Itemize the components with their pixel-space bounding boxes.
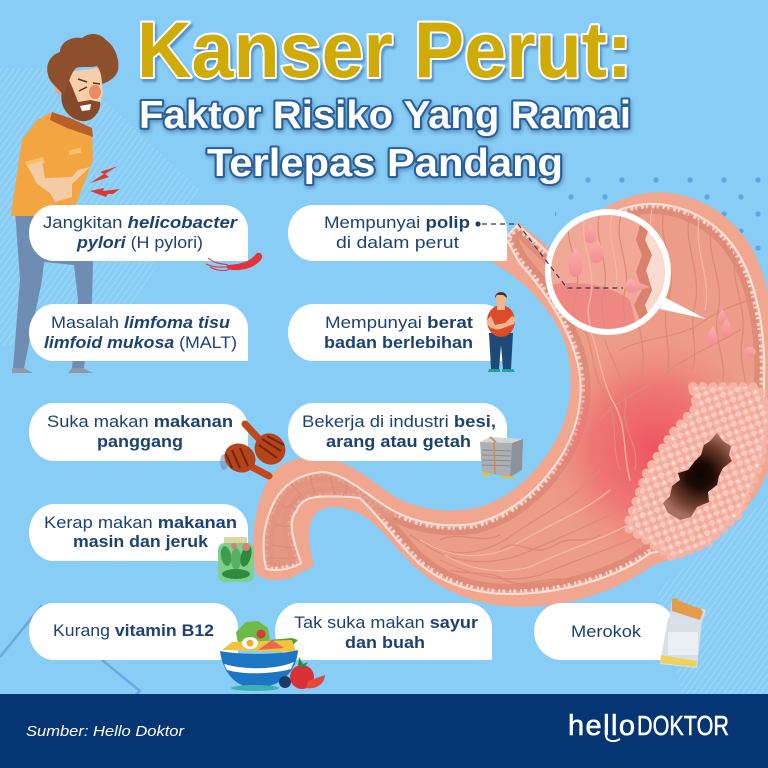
man: pocket highlight (69, 148, 81, 155)
bubble: polyp (288, 205, 507, 261)
source text: Sumber: Hello Doktor (26, 723, 185, 740)
stomach: folds and redness (265, 205, 768, 593)
bubble: salty food (29, 504, 248, 561)
logo: Hello Doktor: hello (568, 710, 635, 742)
bubble: vitamin B12 (29, 603, 238, 660)
logo: Hello Doktor (568, 710, 729, 742)
polyps on stomach wall (708, 309, 756, 357)
bubble: overweight: Mempunyai berat (325, 313, 473, 332)
icon: cigarette pack (660, 598, 706, 668)
man: shoes (12, 368, 93, 373)
bubble: grilled food: Suka makan makanan (47, 412, 233, 431)
diamond outline lines (0, 605, 140, 694)
stomach: tumour mass (627, 387, 768, 557)
bubble: MALT: Masalah limfoma tisu (51, 313, 231, 332)
man: shirt (11, 112, 93, 216)
bubble: overweight: badan berlebihan (324, 333, 473, 352)
bubble: smoking (534, 603, 675, 660)
bubble: helicobacter: Jangkitan helicobacter (43, 213, 239, 232)
man: beard (61, 78, 100, 121)
hatched background area: bottom right (657, 498, 768, 694)
man: sleeve trim (25, 157, 45, 168)
bubble: salty food: masin dan jeruk (73, 532, 209, 551)
bubble: grilled food: panggang (97, 432, 183, 451)
magnified polyps (568, 224, 650, 293)
icon: pickle jar (218, 537, 254, 582)
bubble: salty food: Kerap makan makanan (44, 513, 237, 532)
man: legs (13, 210, 93, 368)
logo: Hello Doktor: DOKTOR (637, 710, 729, 741)
icon: metal stack (480, 437, 523, 478)
icon: polyp leader line (475, 221, 623, 288)
stomach: outer wall (253, 192, 768, 607)
bubble: smoking: Merokok (571, 622, 642, 641)
bubble: MALT: limfoid mukosa (MALT) (44, 333, 237, 352)
bubble: helicobacter: pylori (H pylori) (76, 233, 203, 252)
man: face (68, 68, 103, 108)
man: pain bolts (90, 166, 120, 197)
man clutching stomach (11, 34, 120, 373)
stomach illustration (253, 192, 768, 607)
bubble: helicobacter (29, 205, 248, 261)
man: red cheek (89, 85, 101, 99)
bubble: MALT (29, 304, 248, 361)
icon: bacterium (206, 253, 262, 270)
stomach: dark opening (663, 433, 732, 520)
bubble: polyp: Mempunyai polip (324, 213, 470, 232)
bubble: vitamin B12: Kurang vitamin B12 (53, 621, 214, 640)
bubble: industry (288, 403, 507, 461)
bubble: polyp: di dalam perut (336, 233, 459, 252)
magnifier lens (548, 210, 670, 340)
title (137, 5, 632, 185)
man: closed eyes (78, 79, 100, 91)
bubble: industry: arang atau getah (326, 432, 471, 451)
bubble: industry: Bekerja di industri besi, (302, 412, 496, 431)
icon: overweight man (487, 292, 516, 372)
man: teeth (80, 104, 91, 111)
dotted background area (555, 170, 768, 265)
bubble: grilled food (29, 403, 248, 461)
man: collar (50, 112, 93, 137)
bubble: overweight (288, 304, 507, 361)
subtitle line 1: Faktor Risiko Yang Ramai (139, 94, 631, 137)
icon: salad bowl with tomato (220, 621, 325, 691)
hatched background area: left (0, 68, 200, 345)
title line: Kanser Perut: Kanser Perut: (137, 5, 632, 94)
man: arms and hands (27, 161, 90, 202)
magnifier pointer (660, 297, 706, 319)
icon: grilled chicken (219, 424, 292, 478)
bubble: vegetables and fruit: Tak suka makan sayur (294, 613, 478, 632)
subtitle line 2: Terlepas Pandang (207, 142, 563, 185)
stomach: inner lining (265, 205, 763, 593)
bubble: vegetables and fruit: dan buah (345, 633, 425, 652)
footer bar (0, 694, 768, 768)
man: hair (47, 34, 118, 96)
man: ear (54, 80, 64, 94)
bubble: vegetables and fruit (275, 603, 492, 660)
